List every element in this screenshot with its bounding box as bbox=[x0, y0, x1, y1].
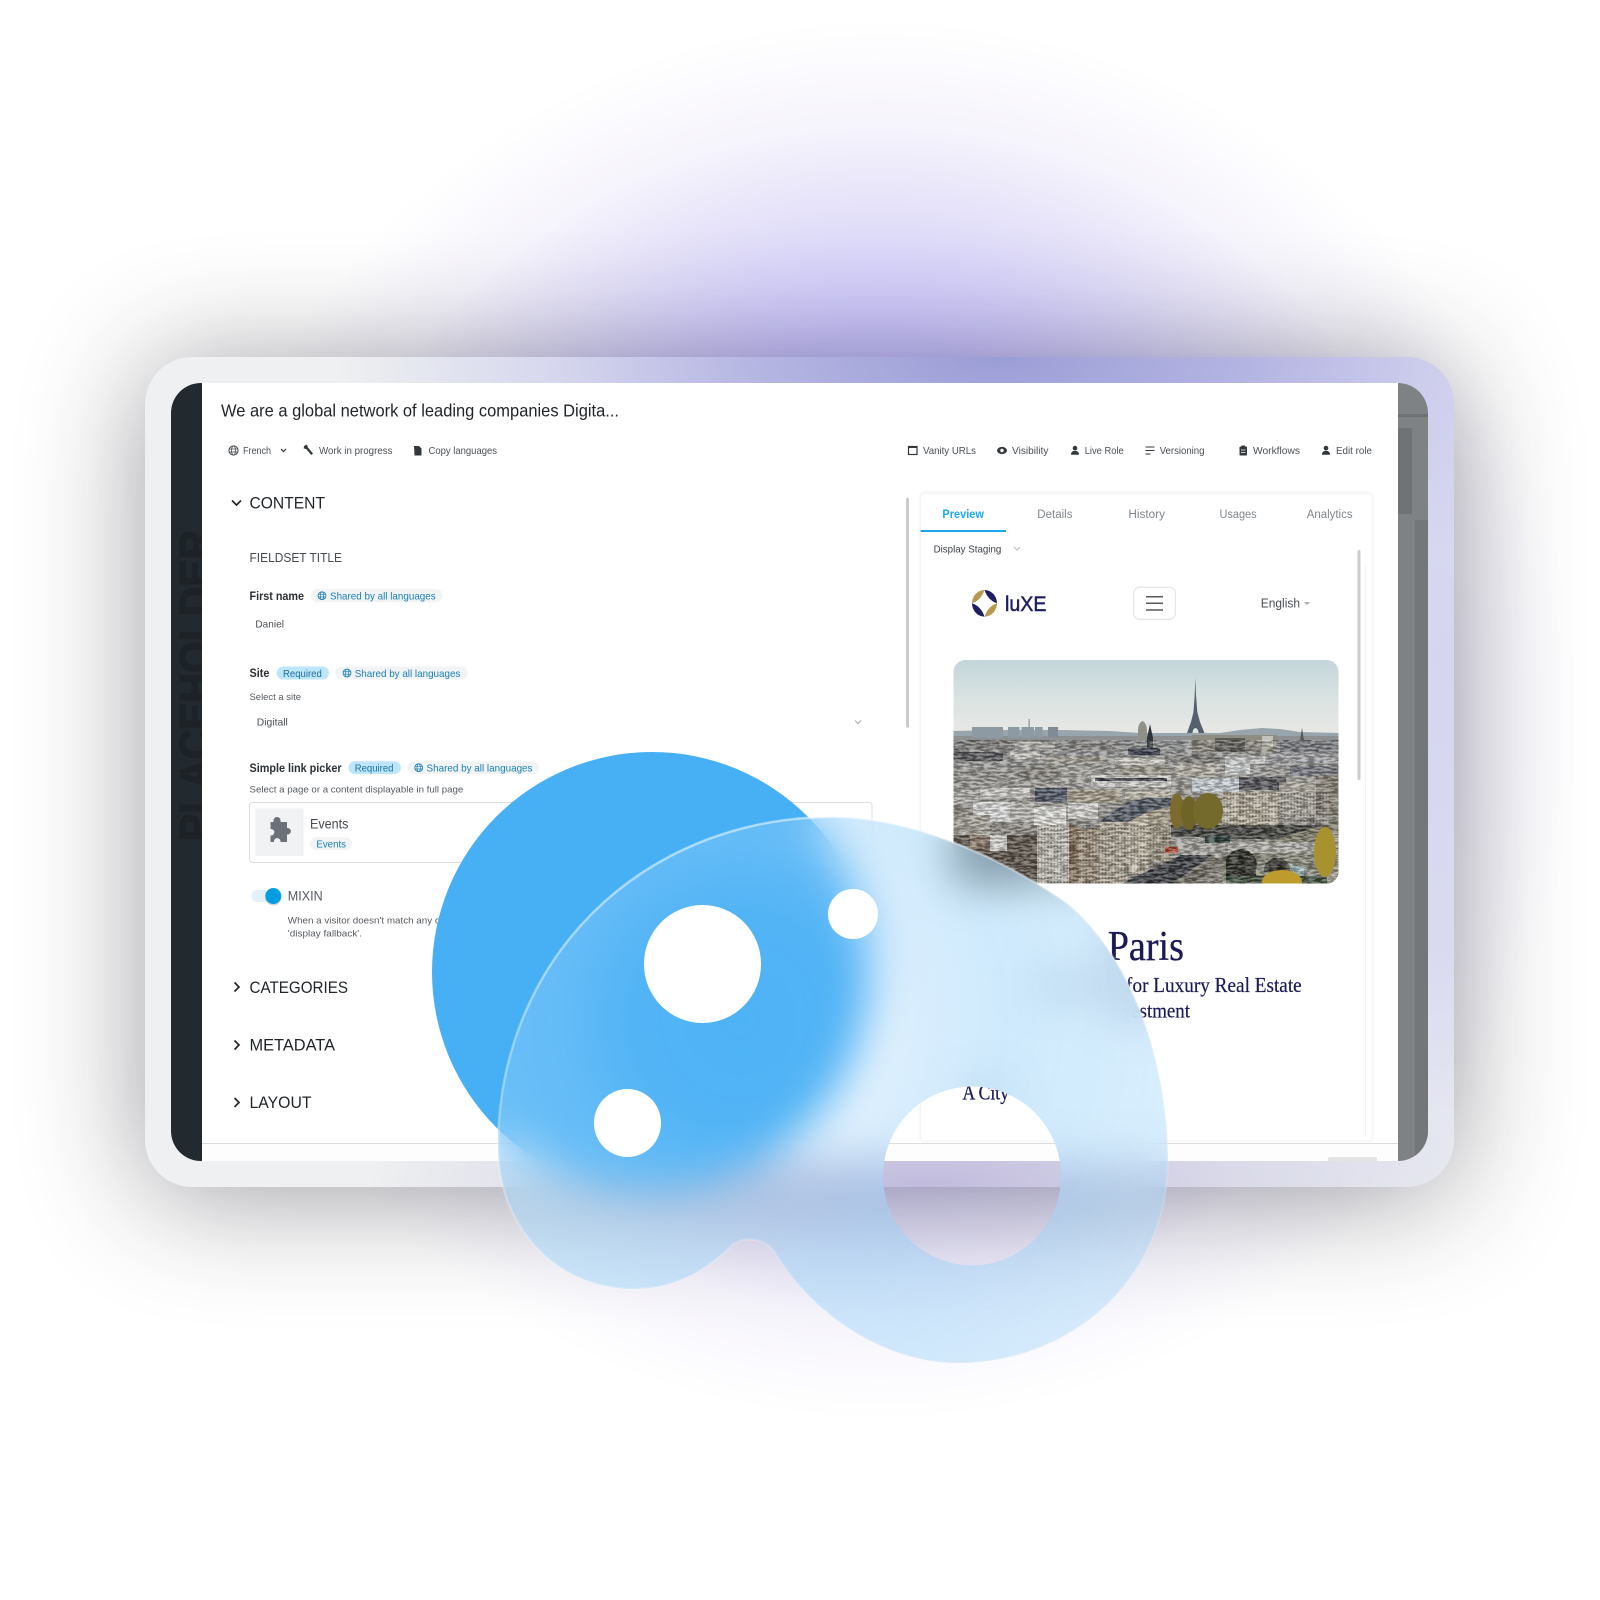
live role bbox=[1071, 445, 1124, 457]
photo: Paris skyline bbox=[953, 660, 1340, 894]
categories header: CATEGORIES bbox=[250, 978, 348, 997]
language selector: French bbox=[243, 445, 271, 457]
events chip: Events bbox=[316, 838, 346, 850]
workflows: Workflows bbox=[1253, 445, 1300, 457]
hamburger menu bbox=[1134, 587, 1175, 619]
preview tabs: Preview bbox=[942, 509, 984, 521]
preview subtitle: Global Hub for Luxury Real Estate bbox=[1031, 973, 1302, 997]
layout header: LAYOUT bbox=[250, 1093, 312, 1112]
facades bbox=[953, 792, 1332, 885]
toolbar right bbox=[908, 445, 1372, 457]
language selector english: English bbox=[1261, 596, 1300, 611]
required chip: Required bbox=[283, 668, 322, 680]
tablet screen bbox=[171, 383, 1428, 1161]
right grey strip bbox=[1398, 383, 1428, 1161]
toolbar left bbox=[229, 444, 497, 457]
field: site: Digitall bbox=[257, 717, 288, 729]
metadata header: METADATA bbox=[250, 1036, 336, 1054]
blue palette back disc bbox=[432, 752, 872, 1192]
picker box: Events bbox=[310, 817, 349, 832]
preview tabs: Details bbox=[1037, 509, 1073, 521]
field: first name: First name bbox=[250, 591, 304, 603]
mid district blocks bbox=[953, 740, 1339, 822]
frosted glass palette bbox=[498, 816, 1168, 1363]
live role: Live Role bbox=[1085, 445, 1124, 457]
mixin toggle: When a visitor doesn't match any content, bbox=[288, 916, 470, 927]
white page panel bbox=[202, 383, 1398, 1161]
field: first name bbox=[250, 589, 442, 630]
preview tabs: Usages bbox=[1220, 509, 1257, 521]
picker box bbox=[250, 802, 872, 862]
page title: We are a global network of leading companies Digita... bbox=[221, 400, 619, 420]
shared chip: Shared by all languages bbox=[426, 762, 532, 774]
field: site: Site bbox=[250, 668, 269, 680]
preview body heading: A City bbox=[962, 1080, 1009, 1104]
versioning: Versioning bbox=[1160, 445, 1205, 457]
preview subtitle: Investment bbox=[1106, 998, 1190, 1022]
field: simple link picker: Select a page or a content displayable in full page bbox=[250, 785, 463, 796]
preview tabs: History bbox=[1128, 509, 1165, 521]
left column scrollbar bbox=[906, 498, 909, 728]
dark sidebar bbox=[171, 383, 202, 1161]
field: site bbox=[250, 666, 861, 729]
city mass bbox=[953, 736, 1339, 886]
visibility: Visibility bbox=[1012, 445, 1049, 457]
preview tabs: Analytics bbox=[1307, 509, 1353, 521]
preview subtitle bbox=[1031, 973, 1302, 1022]
vanity urls: Vanity URLs bbox=[923, 445, 976, 457]
distant towers bbox=[972, 719, 1058, 738]
distant hills bbox=[954, 728, 1338, 736]
shared chip: Shared by all languages bbox=[355, 668, 460, 680]
landmarks bbox=[1128, 678, 1304, 755]
palette hole: large bbox=[644, 905, 760, 1022]
work in progress: Work in progress bbox=[319, 445, 392, 457]
palette hole: lower left bbox=[594, 1089, 660, 1156]
edit role: Edit role bbox=[1336, 445, 1372, 457]
panel: preview bbox=[920, 492, 1373, 1142]
icon: puzzle piece bbox=[270, 817, 291, 842]
mixin toggle: MIXIN bbox=[288, 889, 323, 904]
street and bridge bbox=[1121, 820, 1339, 885]
field: simple link picker bbox=[250, 761, 872, 862]
preview tabs bbox=[921, 509, 1353, 532]
logo: luXE bbox=[972, 590, 1046, 617]
logo: luXE: luXE bbox=[1005, 593, 1046, 616]
mixin toggle: 'display fallback'. bbox=[288, 928, 362, 939]
shared chip: Shared by all languages bbox=[330, 590, 436, 602]
copy languages: Copy languages bbox=[428, 445, 497, 457]
fieldset title: FIELDSET TITLE bbox=[250, 551, 342, 565]
city texture bbox=[953, 740, 1339, 884]
field: simple link picker: Simple link picker bbox=[250, 763, 342, 775]
tablet frame bbox=[145, 357, 1454, 1187]
edit role bbox=[1322, 445, 1372, 457]
preview heading Paris: Paris bbox=[1108, 924, 1184, 970]
trees bbox=[1170, 793, 1336, 884]
content section header: CONTENT bbox=[250, 494, 325, 512]
palette hole: small top bbox=[828, 888, 878, 939]
dark sidebar: PLACEHOLDER bbox=[171, 530, 220, 841]
display staging dropdown: Display Staging bbox=[934, 543, 1001, 555]
language selector bbox=[229, 445, 286, 457]
footer bar bbox=[202, 1143, 1398, 1163]
field: site: Select a site bbox=[250, 692, 301, 703]
required chip: Required bbox=[355, 762, 394, 774]
mixin toggle bbox=[252, 888, 470, 939]
palette rim highlight bbox=[497, 816, 1168, 1290]
field: first name: Daniel bbox=[255, 618, 284, 630]
